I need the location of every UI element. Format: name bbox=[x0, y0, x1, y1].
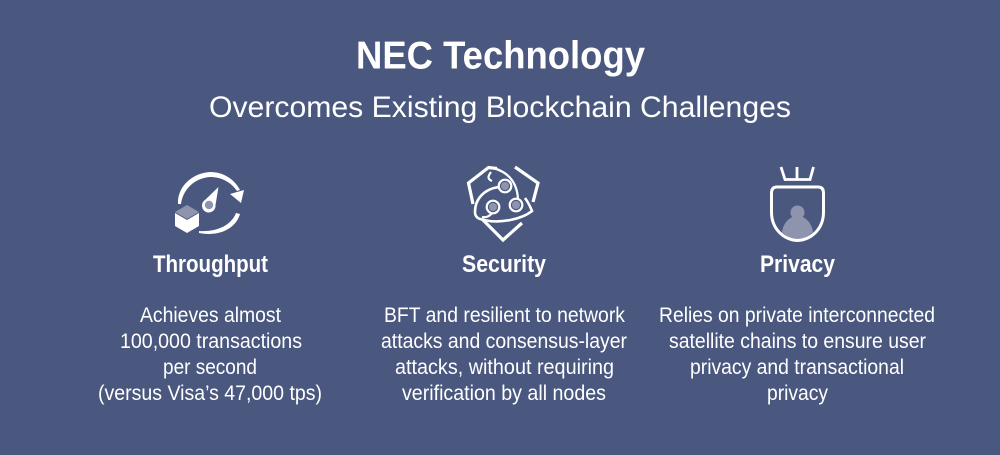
text block: throughput description: 100,000 transactions bbox=[120, 330, 302, 353]
text block: security description: attacks, without requiring bbox=[395, 356, 614, 379]
text block: throughput description: (versus Visa’s 47,000 tps) bbox=[98, 382, 322, 405]
subtitle: Overcomes Existing Blockchain Challenges bbox=[209, 91, 791, 124]
text block: privacy description bbox=[659, 304, 935, 405]
icon: shield with person and crown bbox=[772, 167, 824, 240]
icon: speedometer with cycle arrows and cube bbox=[175, 172, 244, 234]
text block: throughput description: per second bbox=[163, 356, 257, 379]
column: security bbox=[381, 167, 627, 405]
column: throughput bbox=[98, 172, 322, 405]
icon: shield with network nodes bbox=[468, 167, 538, 240]
text block: privacy description: Relies on private interconnected bbox=[659, 304, 935, 327]
text block: security description bbox=[381, 304, 627, 405]
text block: security description: verification by all nodes bbox=[402, 382, 606, 405]
heading: security: Security bbox=[462, 251, 547, 278]
title: NEC Technology bbox=[356, 34, 645, 78]
column: privacy bbox=[659, 167, 935, 405]
text block: security description: BFT and resilient to network bbox=[384, 304, 625, 327]
heading: throughput: Throughput bbox=[153, 251, 268, 278]
text block: throughput description bbox=[98, 304, 322, 405]
text block: privacy description: privacy bbox=[767, 382, 828, 405]
heading: privacy: Privacy bbox=[760, 251, 836, 278]
text block: throughput description: Achieves almost bbox=[140, 304, 281, 327]
text block: privacy description: satellite chains to ensure user bbox=[669, 330, 926, 353]
text block: privacy description: privacy and transactional bbox=[690, 356, 904, 379]
text block: security description: attacks and consensus-layer bbox=[381, 330, 627, 353]
